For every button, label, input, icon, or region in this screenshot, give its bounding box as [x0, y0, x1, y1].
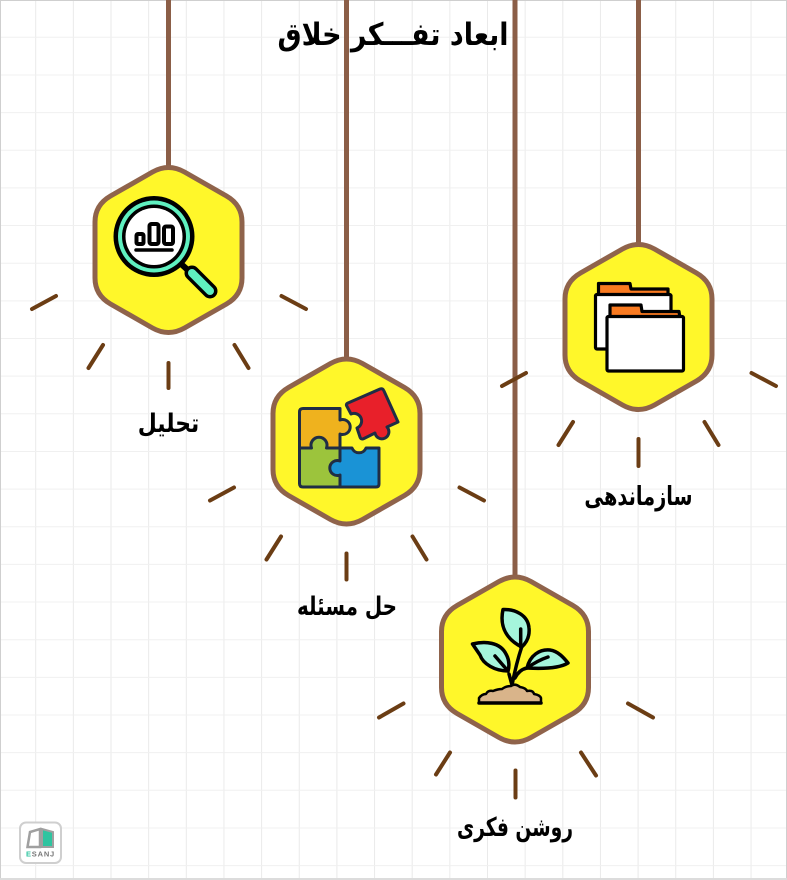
- hexagon badge: [273, 359, 420, 524]
- panel: enlightenment: [379, 577, 653, 843]
- rays: [502, 373, 776, 466]
- rays: [210, 488, 484, 580]
- connector line: analysis: [166, 0, 171, 167]
- label: حل مسئله: [297, 593, 397, 622]
- logo: ESANJ: [20, 822, 61, 863]
- connector line: organizing: [636, 0, 641, 244]
- icon: folders: [596, 284, 684, 371]
- connector line: enlightenment: [512, 0, 518, 576]
- label: روشن فکری: [457, 813, 573, 843]
- panel: problem solving: [210, 359, 484, 622]
- title: ابعاد تفـــکر خلاق: [278, 16, 508, 52]
- panel: analysis: [32, 168, 306, 438]
- hexagon badge: [565, 244, 712, 410]
- label: تحلیل: [138, 408, 199, 438]
- rays: [379, 704, 653, 798]
- icon: puzzle pieces: [300, 389, 398, 487]
- panel: organizing: [502, 244, 776, 512]
- logo: ESANJ: ESANJ: [26, 850, 55, 858]
- connector line: problem solving: [344, 0, 349, 358]
- label: سازماندهی: [584, 482, 693, 512]
- rays: [32, 296, 306, 388]
- hexagon badge: [95, 168, 242, 332]
- icon: magnifying glass with chart: [114, 196, 210, 291]
- icon: sprout: [472, 609, 568, 703]
- hexagon badge: [442, 577, 588, 742]
